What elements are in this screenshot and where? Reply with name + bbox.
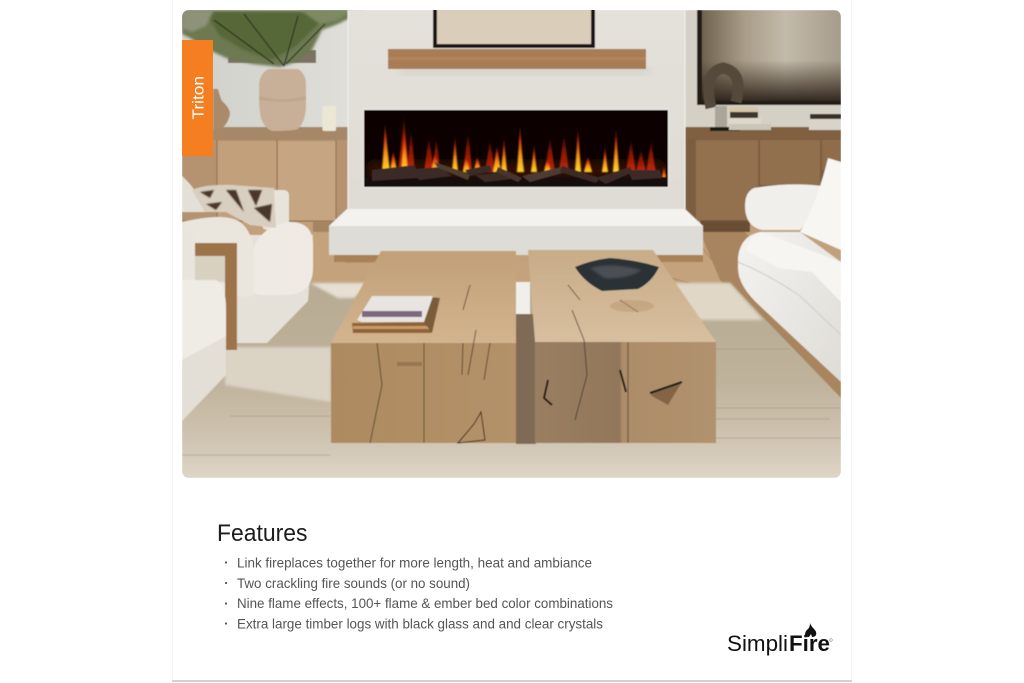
framed art above mantel xyxy=(433,8,595,48)
photo: living room with linear fireplace xyxy=(182,8,841,478)
floor xyxy=(313,232,841,402)
feature two: Two crackling fire sounds (or no sound) xyxy=(237,575,470,591)
logs xyxy=(372,162,662,184)
side table xyxy=(195,243,237,350)
back flames xyxy=(398,112,656,172)
feature three: Nine flame effects, 100+ flame & ember bed color combinations xyxy=(237,595,613,611)
gap between coffee tables xyxy=(516,282,536,444)
SimpliFire logo xyxy=(727,623,832,656)
coffee table left xyxy=(331,251,516,443)
orange tab: Triton xyxy=(182,40,213,156)
SimpliFire logo: Simpli xyxy=(727,631,788,656)
feature list xyxy=(225,554,613,632)
chimney breast wall xyxy=(348,10,685,211)
ember bed xyxy=(364,177,668,187)
left wall with cabinet xyxy=(182,10,352,232)
coffee table right xyxy=(528,250,716,443)
right sofa xyxy=(738,158,841,382)
orange tab: Triton: Triton xyxy=(190,76,208,120)
wood mantel shelf xyxy=(388,49,650,74)
left armchair xyxy=(182,176,313,343)
left sofa xyxy=(182,230,226,421)
plant foliage xyxy=(182,10,366,67)
right wall with artwork, sculpture and cabinet xyxy=(685,10,841,232)
heading: Features: Features xyxy=(217,520,308,547)
black stone bowl xyxy=(575,258,659,291)
feature one: Link fireplaces together for more length, heat and ambiance xyxy=(237,554,592,570)
vase, jug and candle xyxy=(213,69,336,131)
hearth ledge xyxy=(329,209,703,262)
feature four: Extra large timber logs with black glass and and clear crystals xyxy=(237,616,603,632)
bright flames xyxy=(380,123,667,178)
magazines on table xyxy=(352,296,440,333)
panel: white product card xyxy=(172,0,852,682)
SimpliFire logo: Fire xyxy=(789,631,830,656)
area rug xyxy=(182,283,841,478)
fireplace xyxy=(363,109,669,188)
